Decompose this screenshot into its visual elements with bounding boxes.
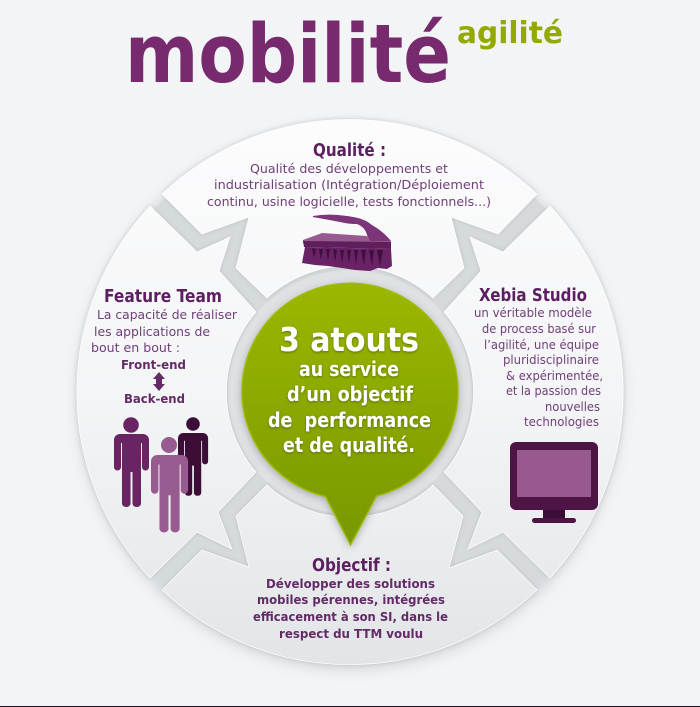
qualité text block: Qualité des développements et xyxy=(250,161,448,176)
feature team text block xyxy=(91,287,238,406)
green speech bubble xyxy=(242,283,458,545)
panel: feature team segment xyxy=(77,206,256,578)
icon: brush xyxy=(302,215,392,271)
objectif text block: mobiles pérennes, intégrées xyxy=(257,592,445,607)
circular diagram backdrop xyxy=(78,124,622,669)
xebia studio text block: Xebia Studio xyxy=(479,286,587,306)
arrow: front-end to back-end xyxy=(153,372,165,391)
xebia studio text block: l’agilité, une équipe xyxy=(484,337,599,352)
bubble text xyxy=(268,320,431,457)
xebia studio text block: et la passion des xyxy=(506,383,601,398)
bubble text: 3 atouts xyxy=(279,320,419,359)
panel: qualité segment xyxy=(162,119,537,298)
panel: objectif segment xyxy=(162,485,537,665)
xebia studio text block: nouvelles xyxy=(545,399,600,414)
qualité text block: industrialisation (Intégration/Déploiement xyxy=(214,177,484,192)
feature team text block: La capacité de réaliser xyxy=(97,307,238,322)
feature team text block: Back-end xyxy=(124,391,185,406)
bubble text: de performance xyxy=(268,408,431,432)
feature team text block: Front-end xyxy=(121,357,186,372)
bubble text: au service xyxy=(299,357,399,381)
person: back dark xyxy=(178,417,208,496)
title: mobilité xyxy=(125,8,451,102)
qualité text block: Qualité : xyxy=(313,141,386,161)
icon: monitor xyxy=(510,442,598,523)
objectif text block: respect du TTM voulu xyxy=(279,626,423,641)
xebia studio text block: technologies xyxy=(524,414,599,429)
objectif text block xyxy=(253,556,448,641)
qualité text block xyxy=(207,141,491,209)
panel: xebia studio segment xyxy=(444,206,623,578)
objectif text block: Développer des solutions xyxy=(266,576,435,591)
title: agilité xyxy=(457,16,563,51)
xebia studio text block: pluridisciplinaire xyxy=(503,352,599,367)
xebia studio text block xyxy=(474,286,603,429)
bubble text: et de qualité. xyxy=(283,433,415,457)
person: left medium xyxy=(114,417,149,507)
person: front light xyxy=(151,437,188,532)
feature team text block: les applications de xyxy=(94,324,210,339)
bubble text: d’un objectif xyxy=(287,382,413,406)
xebia studio text block: un véritable modèle xyxy=(474,305,592,320)
qualité text block: continu, usine logicielle, tests fonctionnels...) xyxy=(207,194,491,209)
xebia studio text block: de process basé sur xyxy=(482,321,597,336)
icon: people xyxy=(114,417,208,532)
objectif text block: Objectif : xyxy=(312,556,391,576)
feature team text block: bout en bout : xyxy=(91,340,180,355)
xebia studio text block: & expérimentée, xyxy=(506,368,603,383)
feature team text block: Feature Team xyxy=(104,287,222,307)
objectif text block: efficacement à son SI, dans le xyxy=(253,609,448,624)
